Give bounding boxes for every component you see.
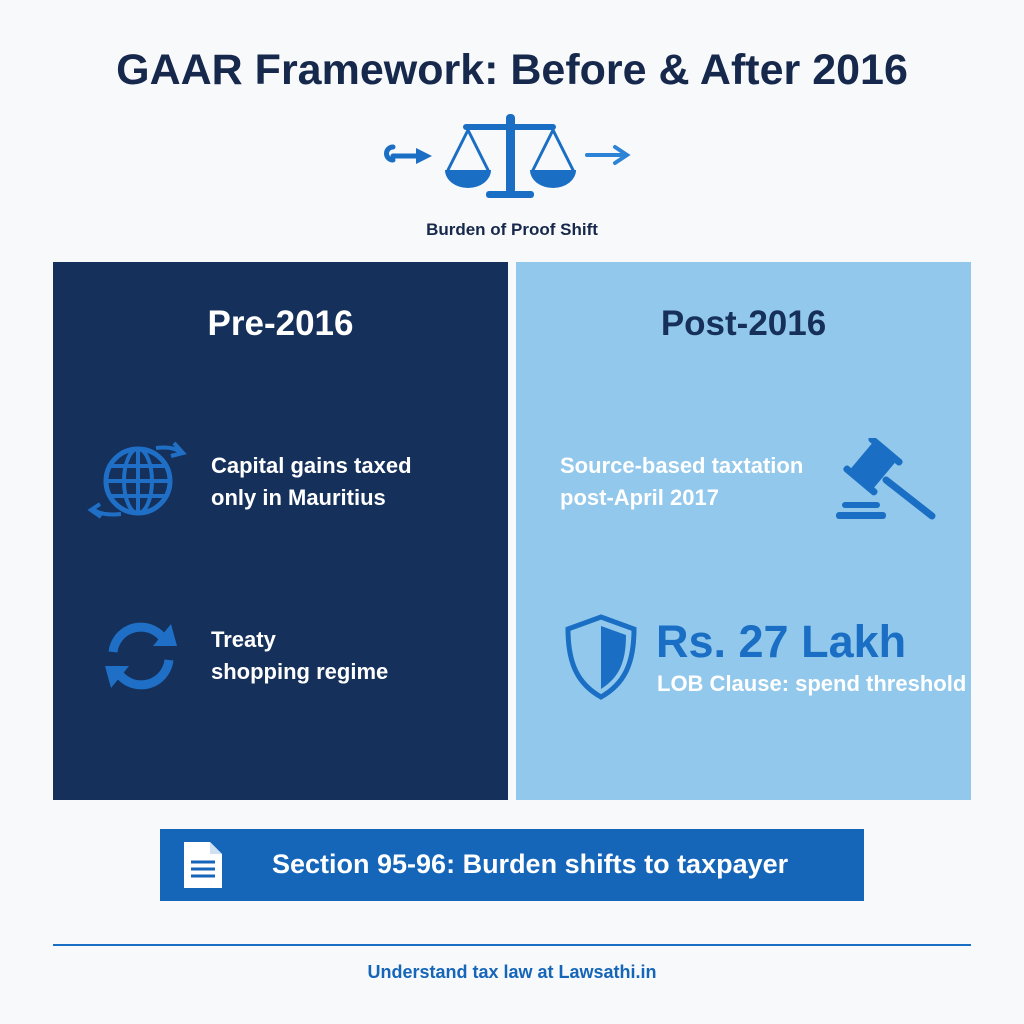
text: source-based	[560, 453, 803, 510]
banner: section 95-96	[160, 829, 864, 901]
text: LOB clause: LOB Clause: spend threshold	[657, 671, 966, 696]
text: treaty shopping	[211, 627, 388, 684]
banner text: Section 95-96: Burden shifts to taxpayer	[272, 849, 788, 879]
text: capital gains: Capital gains taxed	[211, 453, 412, 478]
text: treaty shopping: Treaty	[211, 627, 276, 652]
icon: shield	[566, 614, 636, 700]
text: capital gains: only in Mauritius	[211, 485, 386, 510]
heading: pre-2016: Pre-2016	[208, 304, 353, 343]
subtitle: Burden of Proof Shift	[426, 220, 598, 239]
heading: post-2016: Post-2016	[661, 304, 826, 343]
icon: globe	[88, 442, 187, 518]
text: source-based: Source-based taxtation	[560, 453, 803, 478]
icon: gavel	[836, 438, 936, 520]
icon: scales with arrows	[384, 114, 630, 198]
footer: Understand tax law at Lawsathi.in	[367, 962, 657, 982]
panel: pre-2016	[53, 262, 508, 800]
text: treaty shopping: shopping regime	[211, 659, 388, 684]
icon: document	[184, 842, 222, 888]
text: source-based: post-April 2017	[560, 485, 719, 510]
stat: Rs. 27 Lakh: Rs. 27 Lakh	[656, 616, 906, 667]
panel: post-2016	[516, 262, 971, 800]
title: GAAR Framework: Before & After 2016	[116, 46, 908, 94]
text: capital gains	[211, 453, 412, 510]
icon: cycle arrows	[105, 622, 177, 690]
